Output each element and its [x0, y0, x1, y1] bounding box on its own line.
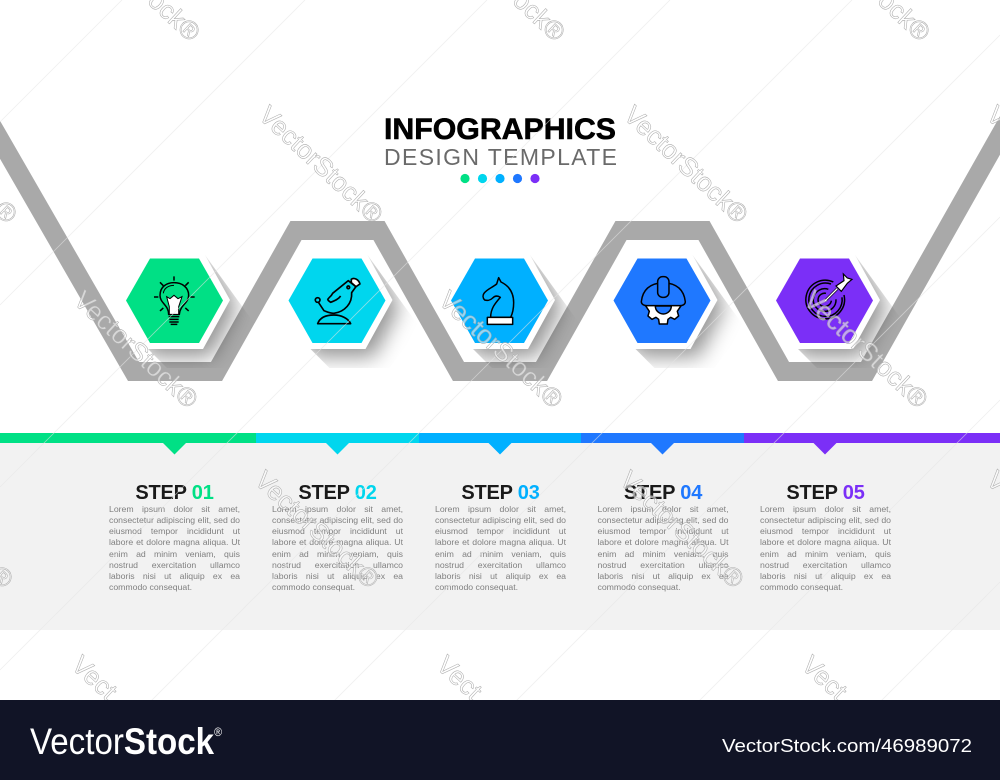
- step 1 body: labore et dolore magna aliqua. Ut: [109, 537, 240, 547]
- watermark overlay: Vect: [431, 649, 489, 706]
- step 4 hexagon with helmet and gear icon: [608, 255, 724, 357]
- step 5 hexagon with target icon: [770, 255, 887, 357]
- watermark overlay: Vect: [796, 649, 854, 706]
- step 3 body: Lorem ipsum dolor sit amet,: [435, 504, 566, 514]
- step 5 body: consectetur adipiscing elit, sed do: [760, 515, 891, 525]
- step 1 body: nostrud exercitation ullamco: [109, 560, 240, 570]
- watermark overlay: VectorStock®: [618, 100, 754, 229]
- step 4 text: [598, 482, 728, 592]
- step 1 text: [109, 482, 240, 592]
- step 2 body: nostrud exercitation ullamco: [272, 560, 403, 570]
- step 2 body: enim ad minim veniam, quis: [272, 549, 403, 559]
- icon: chess knight: [483, 278, 514, 324]
- watermark overlay: VectorStock®: [253, 100, 389, 229]
- step 5 body: enim ad minim veniam, quis: [760, 549, 891, 559]
- step 2 body: laboris nisi ut aliquip ex ea: [272, 571, 403, 581]
- color strip with pointers: [0, 433, 1000, 454]
- step 1 body: [109, 504, 240, 592]
- step 4 body: enim ad minim veniam, quis: [598, 549, 728, 559]
- step 5 body: Lorem ipsum dolor sit amet,: [760, 504, 891, 514]
- colored dots: [460, 174, 540, 183]
- icon: microscope: [315, 279, 360, 324]
- step 2 body: [272, 504, 403, 592]
- footer logo: ®: [214, 725, 222, 739]
- step 4 body: Lorem ipsum dolor sit amet,: [598, 504, 728, 514]
- icon: target and dart: [806, 274, 852, 319]
- step 1 body: laboris nisi ut aliquip ex ea: [109, 571, 240, 581]
- zigzag gray band: [0, 100, 1000, 372]
- step 1 body: Lorem ipsum dolor sit amet,: [109, 504, 240, 514]
- step 1 body: commodo consequat.: [109, 582, 192, 592]
- step 3 body: [435, 504, 566, 592]
- step 5 body: eiusmod tempor incididunt ut: [760, 526, 891, 536]
- step 2 text: [272, 482, 403, 592]
- footer logo: VectorStock: [30, 721, 225, 762]
- step 4 body: nostrud exercitation ullamco: [598, 560, 728, 570]
- step 3 heading: STEP 03: [461, 482, 540, 504]
- step 3 body: consectetur adipiscing elit, sed do: [435, 515, 566, 525]
- step 5 body: labore et dolore magna aliqua. Ut: [760, 537, 891, 547]
- step 2 body: consectetur adipiscing elit, sed do: [272, 515, 403, 525]
- gray text panel: [0, 443, 1000, 630]
- step 4 body: laboris nisi ut aliquip ex ea: [598, 571, 728, 581]
- step 3 hexagon with chess knight icon: [445, 255, 562, 357]
- step 5 body: [760, 504, 891, 592]
- step 5 body: commodo consequat.: [760, 582, 843, 592]
- step 1 body: enim ad minim veniam, quis: [109, 549, 240, 559]
- step 2 body: eiusmod tempor incididunt ut: [272, 526, 403, 536]
- step 5 body: laboris nisi ut aliquip ex ea: [760, 571, 891, 581]
- footer url: VectorStock.com/46989072: [722, 735, 972, 756]
- watermark overlay: VectorStock®: [433, 285, 569, 414]
- title: INFOGRAPHICS: [384, 113, 616, 146]
- subtitle: DESIGN TEMPLATE: [384, 144, 617, 170]
- step 4 body: labore et dolore magna aliqua. Ut: [598, 537, 728, 547]
- step 2 body: Lorem ipsum dolor sit amet,: [272, 504, 403, 514]
- step 1 body: eiusmod tempor incididunt ut: [109, 526, 240, 536]
- step 1 heading: STEP 01: [135, 482, 214, 504]
- step 2 body: commodo consequat.: [272, 582, 355, 592]
- watermark overlay: VectorStock®: [68, 285, 204, 414]
- step 5 text: [760, 482, 891, 592]
- step 1 hexagon with bulb icon: [120, 255, 237, 357]
- step 5 body: nostrud exercitation ullamco: [760, 560, 891, 570]
- main infographic drawing: [0, 116, 1000, 454]
- step 4 body: eiusmod tempor incididunt ut: [598, 526, 728, 536]
- step 3 body: laboris nisi ut aliquip ex ea: [435, 571, 566, 581]
- watermark overlay: VectorStock®: [614, 465, 750, 594]
- watermark overlay: Vect: [66, 649, 124, 706]
- step 1 body: consectetur adipiscing elit, sed do: [109, 515, 240, 525]
- icon: helmet with gear: [641, 277, 685, 324]
- step 4 heading: STEP 04: [624, 482, 702, 504]
- watermark overlay: VectorStock®: [249, 465, 385, 594]
- icon: light bulb: [154, 276, 195, 324]
- step 5 heading: STEP 05: [786, 482, 865, 504]
- footer bar: [0, 700, 1000, 780]
- watermark overlay: VectorStock®: [798, 285, 934, 414]
- step 3 body: enim ad minim veniam, quis: [435, 549, 566, 559]
- step 4 body: consectetur adipiscing elit, sed do: [598, 515, 728, 525]
- step 2 heading: STEP 02: [298, 482, 377, 504]
- step 2 hexagon with microscope icon: [282, 255, 400, 357]
- step 4 body: commodo consequat.: [598, 582, 681, 592]
- step 3 text: [435, 482, 566, 592]
- step 2 body: labore et dolore magna aliqua. Ut: [272, 537, 403, 547]
- step 4 body: [598, 504, 728, 592]
- step 3 body: eiusmod tempor incididunt ut: [435, 526, 566, 536]
- step 3 body: labore et dolore magna aliqua. Ut: [435, 537, 566, 547]
- step 3 body: commodo consequat.: [435, 582, 518, 592]
- step 3 body: nostrud exercitation ullamco: [435, 560, 566, 570]
